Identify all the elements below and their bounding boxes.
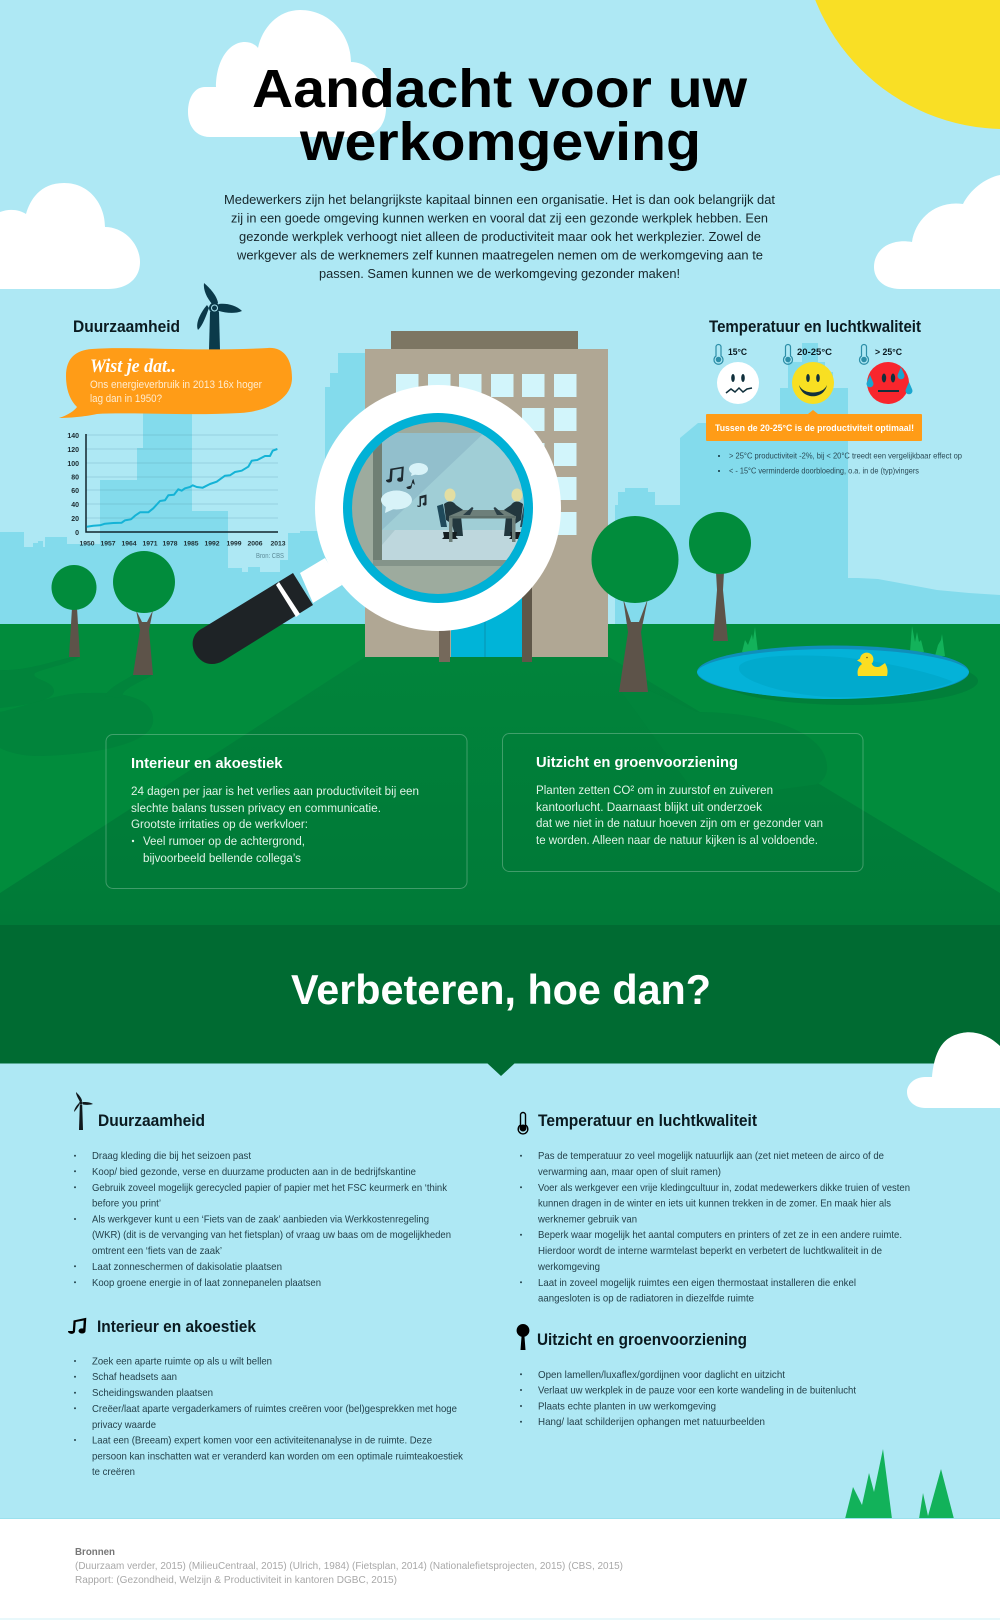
callout: optimal productivity: Tussen de 20-25°C is de productiviteit optimaal! — [715, 423, 914, 434]
tips list: aangesloten is op de radiatoren in diezelfde ruimte — [538, 1292, 754, 1304]
heading: Duurzaamheid — [73, 318, 180, 336]
tips list: Als werkgever kunt u een ‘Fiets van de zaak’ aanbieden via Werkkostenregeling — [92, 1214, 429, 1226]
title: Aandacht voor uw — [252, 59, 748, 119]
callout: wist je dat: Wist je dat.. — [90, 356, 176, 377]
intro text: zij in een goede omgeving kunnen werken en vooral dat zij een gezonde werkplek hebben. Een — [231, 210, 768, 226]
cloud behind title — [188, 10, 386, 137]
tree shadows — [0, 657, 827, 800]
tips list: Draag kleding die bij het seizoen past — [92, 1150, 251, 1162]
callout: wist je dat: lag dan in 1950? — [90, 393, 162, 405]
tips list: Voer als werkgever een vrije kledingcultuur in, zodat medewerkers dikke truien of vesten — [538, 1182, 910, 1194]
intro text: passen. Samen kunnen we de werkomgeving gezonder maken! — [319, 266, 680, 281]
panel: interieur en akoestiek (green) — [106, 734, 467, 888]
body text: bijvoorbeeld bellende collega’s — [143, 851, 301, 865]
face: hot — [867, 362, 913, 404]
music notes — [386, 466, 427, 507]
line chart: energieverbruik: 1978 — [162, 540, 178, 548]
line chart: energieverbruik: 1964 — [121, 540, 137, 548]
icon: music notes — [68, 1318, 86, 1334]
line chart: energieverbruik: 2006 — [247, 540, 263, 548]
tips list: werkomgeving — [537, 1261, 600, 1273]
tips list: Laat een (Breeam) expert komen voor een activiteitenanalyse in de ruimte. Deze — [92, 1434, 432, 1446]
temperature notes: > 25°C productiviteit -2%, bij < 20°C treedt een vergelijkbaar effect op — [729, 450, 962, 460]
tree 4 — [689, 512, 751, 641]
intro text: werkgever als de werknemers zelf kunnen maatregelen nemen om de werkomgeving aan te — [236, 248, 763, 262]
line chart: energieverbruik: 2013 — [270, 540, 286, 548]
pond shadow — [722, 657, 978, 705]
meeting table with laptops — [449, 507, 516, 542]
intro text: gezonde werkplek verhoogt niet alleen de productiviteit maar ook het werkplezier. Zowel de — [239, 229, 761, 244]
tips list: werknemer gebruik van — [537, 1214, 637, 1226]
line chart: energieverbruik: 1971 — [142, 540, 158, 548]
sources text: Rapport: (Gezondheid, Welzijn & Productiviteit in kantoren DGBC, 2015) — [75, 1574, 397, 1586]
tips list: Koop/ bied gezonde, verse en duurzame producten aan in de bedrijfskantine — [92, 1166, 416, 1178]
tips list: Koop groene energie in of laat zonnepanelen plaatsen — [92, 1277, 321, 1289]
line chart: energieverbruik: 140 — [67, 433, 79, 440]
heading: Uitzicht en groenvoorziening — [536, 755, 738, 771]
sun — [801, 0, 1000, 129]
temperature labels: 15°C — [728, 347, 747, 357]
rubber duck — [857, 653, 888, 676]
line chart: energieverbruik: Bron: CBS — [256, 551, 284, 560]
grass spikes — [845, 1449, 954, 1519]
line chart: energieverbruik: 60 — [71, 488, 79, 495]
water — [697, 646, 969, 698]
heading: Temperatuur en luchtkwaliteit — [709, 318, 921, 336]
tips list: Verlaat uw werkplek in de pauze voor een korte wandeling in de buitenlucht — [538, 1384, 856, 1396]
body text — [131, 784, 419, 865]
tips list: Creëer/laat aparte vergaderkamers of ruimtes creëren voor (bel)gesprekken met hoge — [92, 1403, 457, 1415]
panel: duurzaamheid — [59, 283, 292, 560]
face: happy — [792, 362, 834, 404]
line chart: energieverbruik: 1950 — [79, 540, 95, 548]
reeds — [742, 626, 945, 656]
building — [365, 331, 608, 662]
lens ring — [315, 385, 561, 631]
line chart: energieverbruik: 1992 — [204, 540, 220, 548]
tips list: Scheidingswanden plaatsen — [92, 1387, 213, 1399]
tips list: Open lamellen/luxaflex/gordijnen voor daglicht en uitzicht — [538, 1369, 785, 1381]
temperature labels: 20-25°C — [797, 347, 833, 357]
section: interieur tips — [68, 1318, 464, 1478]
temperature notes — [718, 450, 962, 476]
tree 2 — [113, 551, 175, 675]
icon: tree — [517, 1324, 529, 1350]
temperature labels — [728, 347, 902, 357]
building roof — [391, 331, 578, 350]
sources text: (Duurzaam verder, 2015) (MilieuCentraal, 2015) (Ulrich, 1984) (Fietsplan, 2014) (Nationalefietsprojecten, 2015) (CBS, 2015) — [75, 1560, 623, 1572]
tips list: Plaats echte planten in uw werkomgeving — [538, 1400, 716, 1412]
employee left with chair — [437, 488, 463, 539]
skyline — [0, 343, 1000, 640]
icon: wind turbine — [74, 1092, 93, 1130]
tips list: Hierdoor wordt de interne warmtelast beperkt en verbetert de luchtkwaliteit in de — [538, 1245, 882, 1257]
icon: thermometer 20-25 — [784, 344, 792, 364]
speech bubbles — [381, 463, 428, 513]
magnifying glass — [193, 385, 561, 664]
body text — [536, 783, 823, 847]
cloud lower right — [907, 1032, 1000, 1108]
tips list: kunnen dragen in de winter en iets uit kunnen trekken in de zomer. En maak hier als — [538, 1198, 891, 1210]
tips list: Pas de temperatuur zo veel mogelijk natuurlijk aan (zet niet meteen de airco of de — [538, 1150, 884, 1162]
body text: dat we niet in de natuur hoeven zijn om er gezonder van — [536, 816, 823, 830]
line chart: energieverbruik: 120 — [67, 447, 79, 454]
tips list — [74, 1356, 464, 1478]
band: verbeteren: Verbeteren, hoe dan? — [291, 966, 711, 1013]
tips list: (WKR) (dit is de vervanging van het fietsplan) of vraag uw baas om de mogelijkheden — [92, 1229, 451, 1241]
line chart: energieverbruik: 1957 — [100, 540, 116, 548]
body text: te worden. Alleen naar de natuur kijken is al voldoende. — [536, 833, 818, 847]
tips list: before you print’ — [92, 1198, 161, 1210]
tips list: omtrent een ‘fiets van de zaak’ — [92, 1245, 222, 1257]
body text: slechte balans tussen privacy en communicatie. — [131, 801, 381, 815]
section: uitzicht tips — [517, 1324, 856, 1428]
line chart: energieverbruik: 1999 — [226, 540, 242, 548]
footer — [0, 1518, 1000, 1620]
trees — [52, 512, 751, 692]
tips list: Zoek een aparte ruimte op als u wilt bellen — [92, 1356, 272, 1368]
tips list: te creëren — [92, 1466, 135, 1478]
line chart: energieverbruik: 20 — [71, 516, 79, 523]
callout: optimal productivity — [706, 410, 922, 441]
panel: temperatuur en luchtkwaliteit — [706, 318, 962, 476]
intro text: Medewerkers zijn het belangrijkste kapitaal binnen een organisatie. Het is dan ook belangrijk dat — [224, 192, 775, 207]
sources heading: Bronnen — [75, 1547, 115, 1558]
icon: wind turbine — [197, 283, 242, 350]
body text: kantoorlucht. Daarnaast blijkt uit onderzoek — [536, 800, 763, 814]
tips list — [74, 1150, 451, 1289]
windows — [396, 374, 576, 535]
intro text — [224, 192, 775, 281]
line chart: energieverbruik: 1985 — [183, 540, 199, 548]
body text: 24 dagen per jaar is het verlies aan productiviteit bij een — [131, 784, 419, 798]
tips list: Schaf headsets aan — [92, 1371, 177, 1383]
ground — [0, 624, 1000, 934]
tips list: Beperk waar mogelijk het aantal computers en printers of zet ze in een andere ruimte. — [538, 1229, 902, 1241]
tips list: verwarming aan, maar open of sluit ramen) — [538, 1166, 721, 1178]
handle — [193, 558, 342, 664]
icon: thermometer 15 — [714, 344, 723, 364]
temperature labels: > 25°C — [875, 347, 902, 357]
office scene in lens — [352, 422, 524, 594]
callout: wist je dat — [59, 348, 292, 418]
heading: Interieur en akoestiek — [97, 1318, 257, 1336]
icon: thermometer 25 — [860, 344, 868, 364]
tree 1 — [52, 565, 96, 657]
tips list: Laat in zoveel mogelijk ruimtes een eigen thermostaat installeren die enkel — [538, 1277, 856, 1289]
band: verbeteren — [0, 925, 1000, 1076]
sources text — [75, 1560, 623, 1586]
line chart: energieverbruik: 0 — [75, 530, 79, 537]
tips list: Gebruik zoveel mogelijk gerecycled papier of papier met het FSC keurmerk en ‘think — [92, 1182, 448, 1194]
cloud right — [874, 175, 1000, 289]
door — [439, 570, 532, 662]
section: duurzaamheid tips — [74, 1092, 451, 1289]
tree 3 — [592, 516, 678, 692]
tips list — [520, 1150, 910, 1304]
temperature notes: < - 15°C verminderde doorbloeding, o.a. in de (typ)vingers — [729, 466, 919, 476]
line chart: energieverbruik: 80 — [71, 474, 79, 482]
building facade — [365, 349, 608, 657]
heading: Uitzicht en groenvoorziening — [537, 1331, 747, 1349]
title: werkomgeving — [299, 112, 701, 172]
line chart: energieverbruik — [67, 433, 286, 560]
body text: Veel rumoer op de achtergrond, — [143, 834, 305, 848]
heading: Temperatuur en luchtkwaliteit — [538, 1112, 757, 1130]
icon: thermometer — [518, 1112, 528, 1134]
face: cold — [717, 362, 759, 404]
cloud left — [0, 183, 140, 289]
callout: wist je dat: Ons energieverbruik in 2013 16x hoger — [90, 379, 262, 391]
tips list — [520, 1369, 856, 1428]
title — [252, 59, 748, 172]
tips list: persoon kan inschatten wat er veranderd kan worden om een optimale ruimteakoestiek — [92, 1450, 464, 1462]
section: temperatuur tips — [518, 1112, 910, 1304]
pond — [697, 626, 978, 705]
panel: uitzicht en groenvoorziening (green) — [502, 734, 863, 872]
line chart: energieverbruik: 100 — [67, 461, 79, 468]
body text: Planten zetten CO² om in zuurstof en zuiveren — [536, 783, 773, 797]
tips list: Laat zonneschermen of dakisolatie plaatsen — [92, 1261, 282, 1273]
line chart: energieverbruik: 40 — [71, 502, 79, 509]
path on lawn — [0, 657, 1000, 930]
body text: Grootste irritaties op de werkvloer: — [131, 817, 308, 831]
tips list: Hang/ laat schilderijen ophangen met natuurbeelden — [538, 1416, 765, 1428]
employee right with chair — [504, 488, 524, 539]
tips list: privacy waarde — [92, 1419, 156, 1431]
heading: Duurzaamheid — [98, 1112, 205, 1130]
heading: Interieur en akoestiek — [131, 756, 283, 772]
